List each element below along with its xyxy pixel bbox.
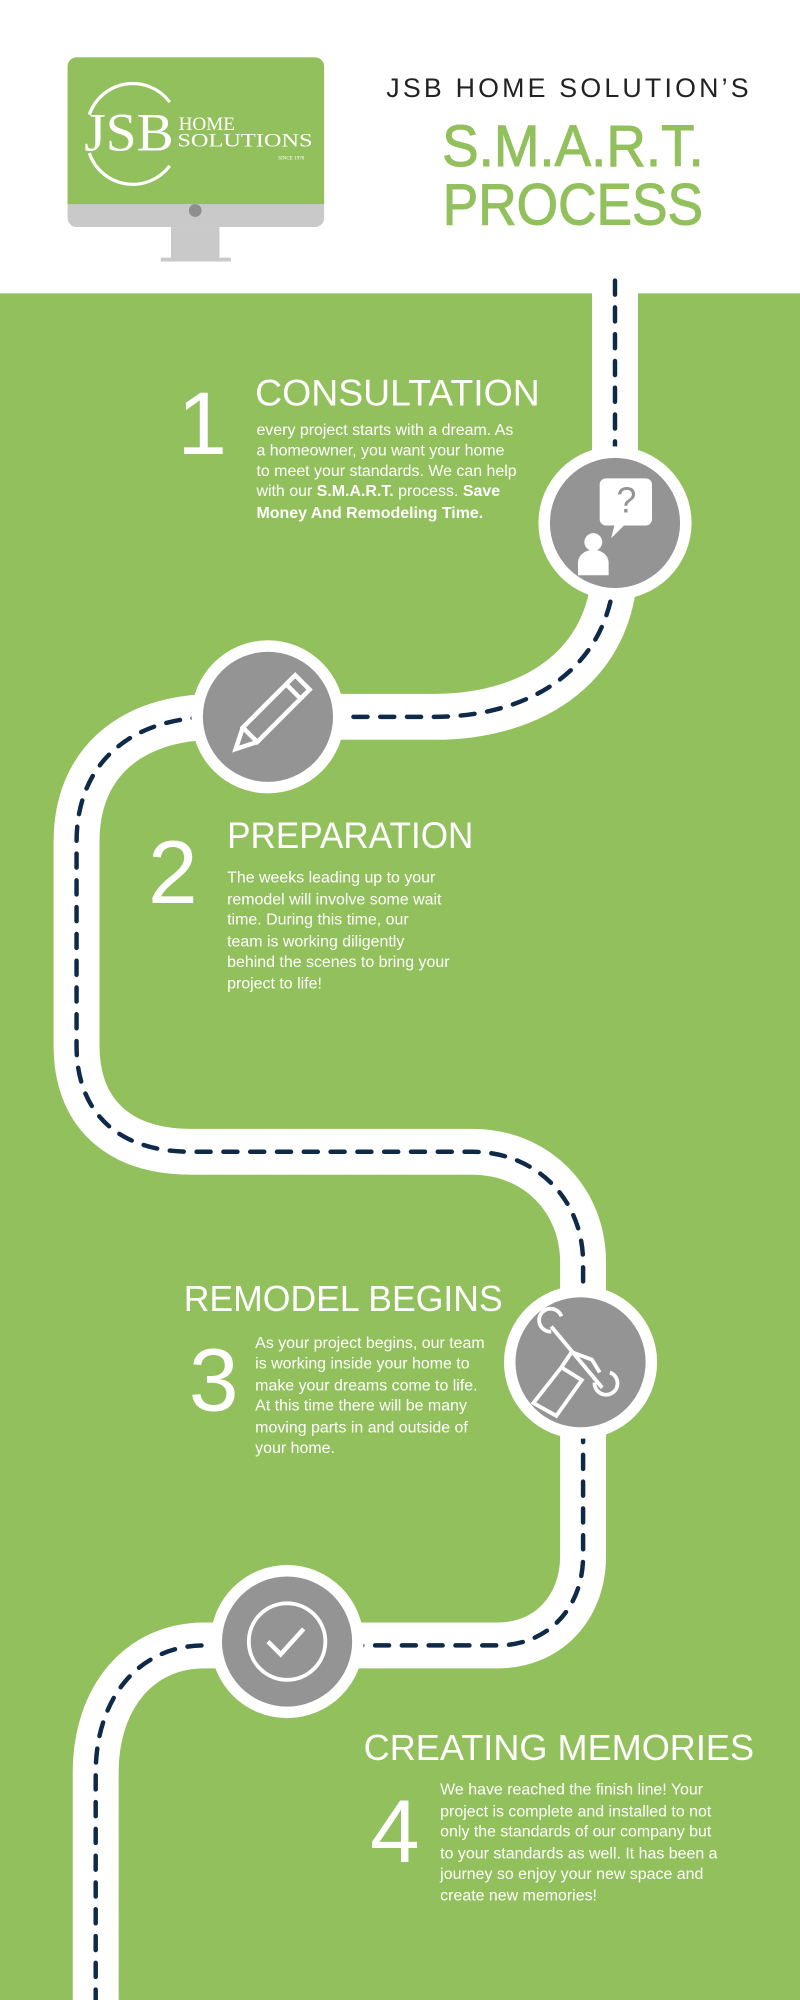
step 1 text: a homeowner, you want your home [256, 442, 505, 459]
step 4 text: CREATING MEMORIES [364, 1728, 754, 1768]
step 1 text: Money And Remodeling Time. [256, 505, 483, 522]
title: PROCESS [443, 172, 703, 237]
monitor logo: SOLUTIONS [177, 131, 313, 152]
step 4 text: to your standards as well. It has been a [440, 1845, 718, 1862]
step 3 text: is working inside your home to [255, 1356, 470, 1373]
icon: pencil [191, 640, 344, 793]
step 1 text: every project starts with a dream. As [256, 422, 513, 439]
icon: wrench hand [504, 1286, 657, 1439]
title: JSB HOME SOLUTION’S [386, 73, 752, 103]
step 3 text: As your project begins, our team [255, 1335, 485, 1352]
step 2 text: The weeks leading up to your [227, 870, 436, 887]
step 2 text: project to life! [227, 976, 322, 993]
step 2 text: team is working diligently [227, 933, 404, 950]
step 3 text: moving parts in and outside of [255, 1419, 468, 1436]
step 4 text: project is complete and installed to not [440, 1803, 712, 1820]
monitor logo: HOME [179, 114, 235, 135]
step 4 text: only the standards of our company but [440, 1824, 712, 1841]
logo ring [89, 84, 170, 184]
step 4 text: We have reached the finish line! Your [440, 1782, 704, 1799]
step 3 text [184, 1279, 503, 1457]
step 1 text [177, 373, 540, 522]
road [77, 281, 615, 2000]
title: S.M.A.R.T. [442, 114, 704, 179]
step 3 text: At this time there will be many [255, 1398, 467, 1415]
step 4 text: 4 [370, 1781, 420, 1881]
step 4 text [364, 1728, 754, 1905]
icon: consultation: ? [617, 481, 636, 521]
step 3 text: 3 [189, 1330, 238, 1430]
step 2 text: time. During this time, our [227, 912, 409, 929]
step 4 text: journey so enjoy your new space and [439, 1866, 703, 1883]
step 1 text: 1 [177, 373, 227, 473]
step 2 text: 2 [148, 822, 198, 922]
step 2 text: PREPARATION [227, 815, 473, 856]
step 1 text: CONSULTATION [255, 373, 540, 414]
step 3 text: make your dreams come to life. [255, 1377, 478, 1394]
step 1 text: to meet your standards. We can help [256, 463, 517, 480]
step 2 text [148, 815, 473, 993]
step 2 text: behind the scenes to bring your [227, 954, 450, 971]
monitor logo: JSB [84, 103, 174, 163]
monitor logo: SINCE 1978 [278, 155, 305, 161]
step 1 text: with our S.M.A.R.T. process. Save [256, 483, 500, 500]
step 3 text: your home. [255, 1440, 335, 1457]
step 2 text: remodel will involve some wait [227, 891, 442, 908]
icon: checkmark [211, 1565, 364, 1718]
title [386, 73, 752, 237]
step 4 text: create new memories! [440, 1888, 597, 1905]
icon: consultation [538, 446, 692, 599]
monitor logo [68, 57, 324, 261]
step 3 text: REMODEL BEGINS [184, 1279, 503, 1319]
